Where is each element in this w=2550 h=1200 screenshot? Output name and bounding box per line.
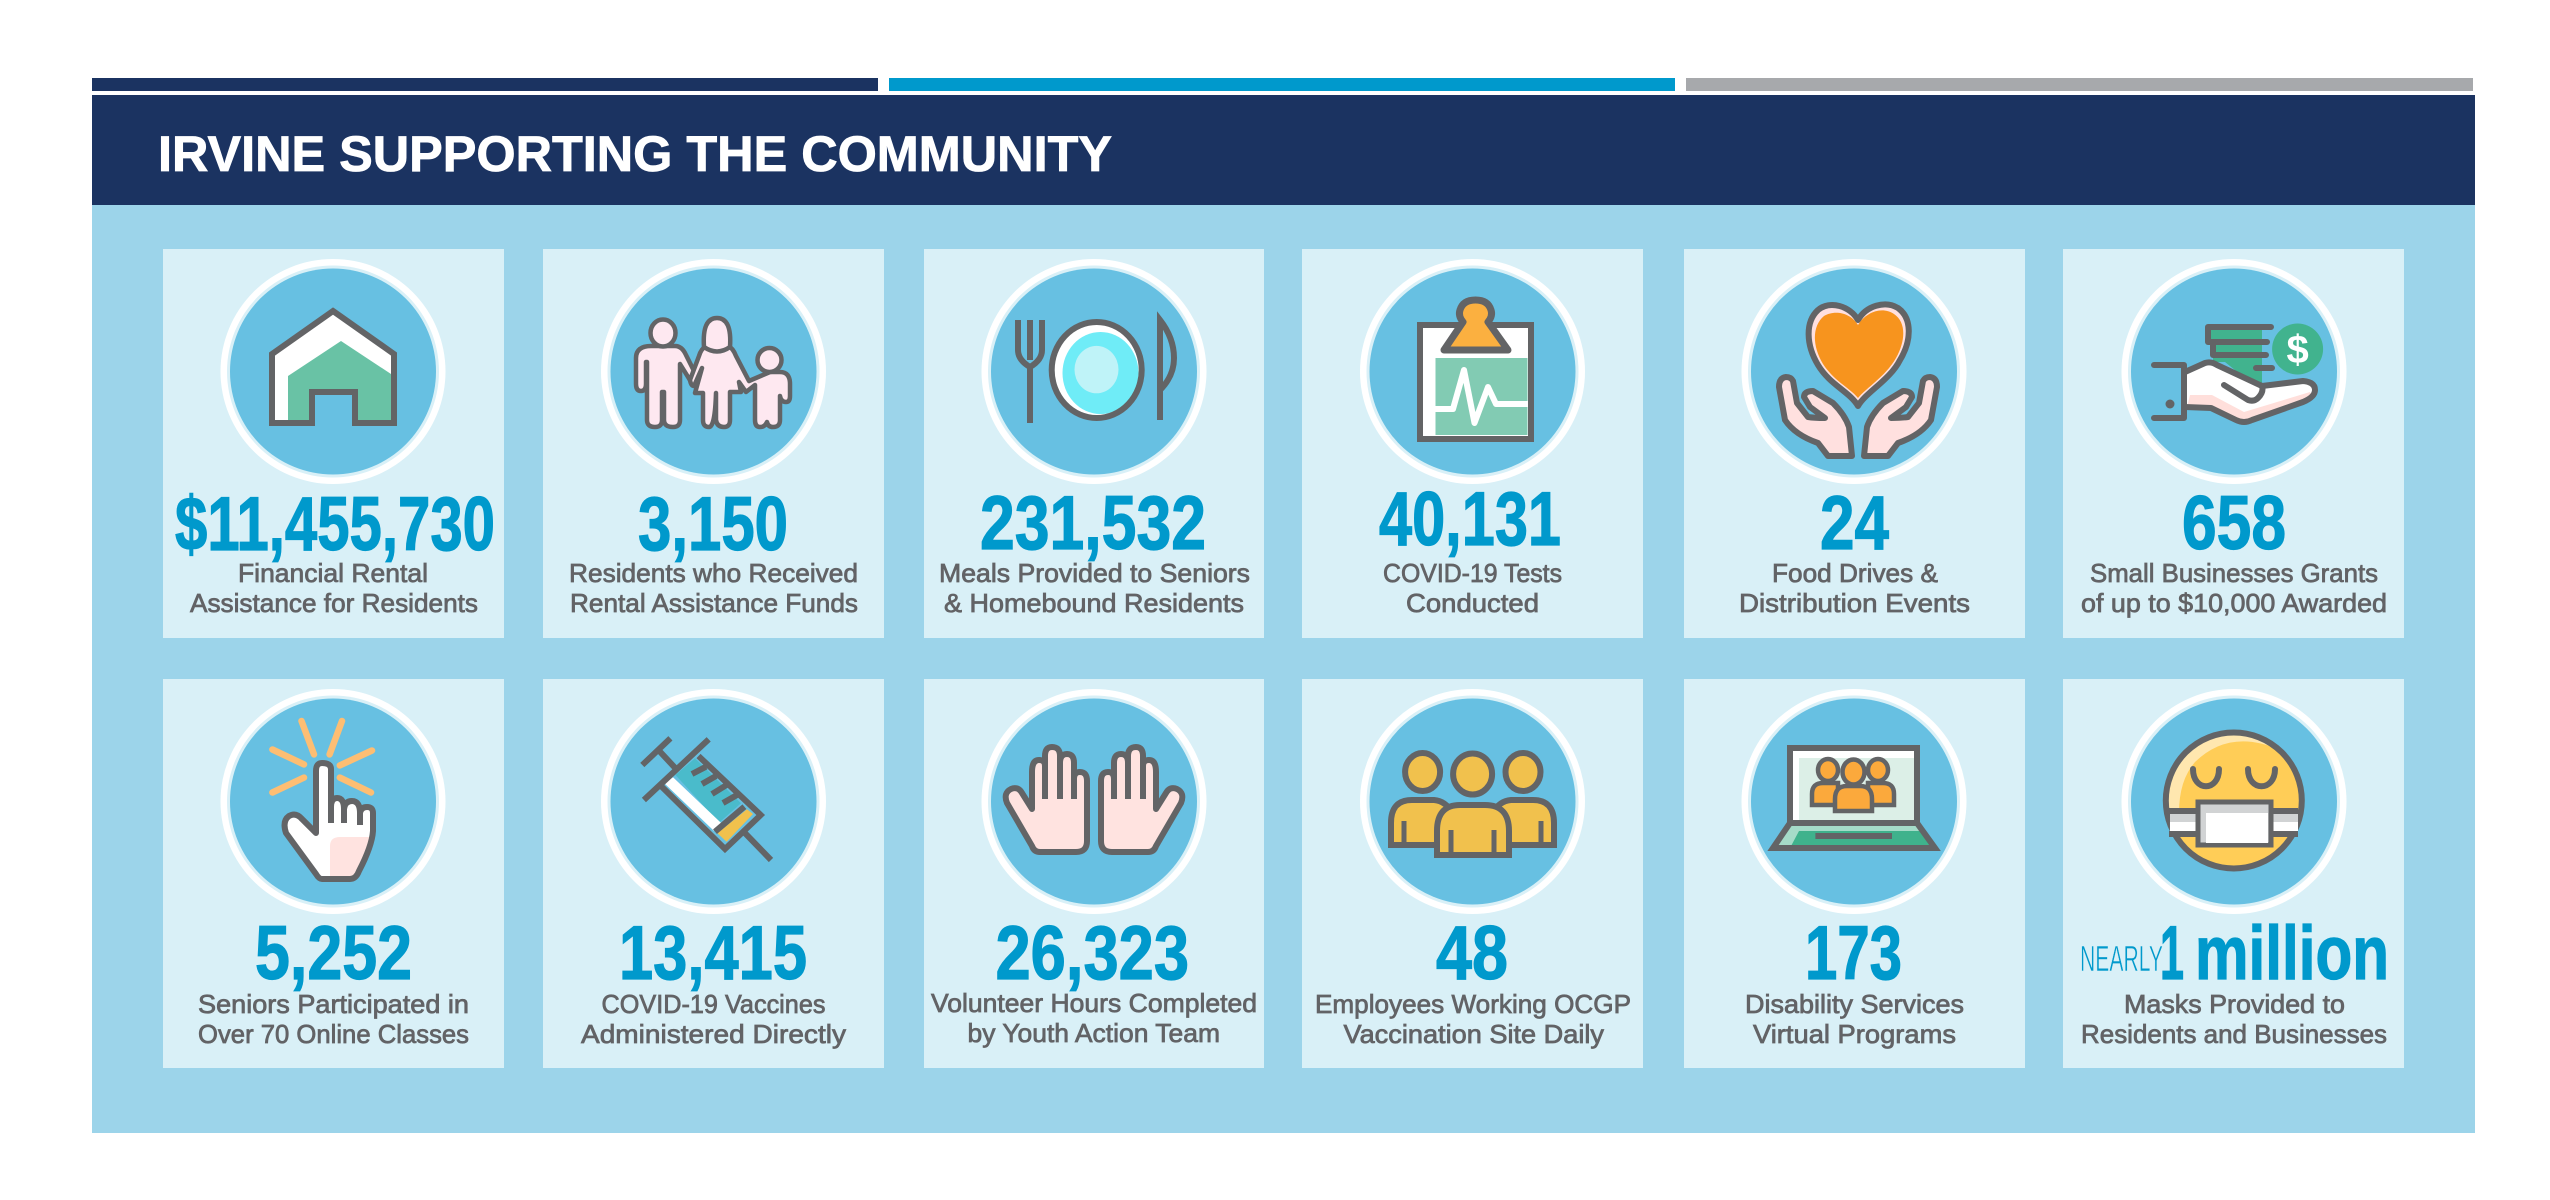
label: Rental Assistance Funds bbox=[570, 588, 858, 618]
number: 40,131 bbox=[1379, 477, 1561, 562]
number: $11,455,730 bbox=[175, 482, 495, 567]
label bbox=[190, 558, 478, 618]
label bbox=[1315, 989, 1631, 1049]
label: Disability Services bbox=[1745, 989, 1964, 1019]
label: Conducted bbox=[1406, 588, 1539, 618]
label bbox=[939, 558, 1250, 618]
number: 231,532 bbox=[980, 481, 1206, 566]
icon: pointing hand bbox=[220, 689, 446, 914]
label: Vaccination Site Daily bbox=[1344, 1019, 1604, 1049]
label bbox=[1745, 989, 1964, 1049]
panel: covid-19 vaccines bbox=[543, 679, 884, 1068]
icon: three people bbox=[1360, 689, 1585, 914]
number: 658 bbox=[2182, 481, 2286, 566]
panel: light blue background bbox=[92, 205, 2475, 1133]
number: nearly 1 million: 1 bbox=[2160, 911, 2184, 996]
label bbox=[198, 989, 469, 1049]
icon: house bbox=[220, 259, 446, 484]
label bbox=[569, 558, 858, 618]
icon: face with mask bbox=[2122, 689, 2346, 914]
label: & Homebound Residents bbox=[944, 588, 1244, 618]
number: nearly 1 million: NEARLY bbox=[2080, 938, 2163, 979]
label: Small Businesses Grants bbox=[2090, 558, 2378, 588]
number: 3,150 bbox=[638, 482, 788, 567]
icon: hand with money: $ bbox=[2286, 328, 2309, 372]
icon: heart in hands bbox=[1742, 259, 1966, 484]
icon: laptop with video call bbox=[1742, 689, 1966, 914]
label: Seniors Participated in bbox=[198, 989, 469, 1019]
title: IRVINE SUPPORTING THE COMMUNITY bbox=[158, 126, 1112, 182]
icon: open hands bbox=[982, 689, 1206, 914]
label: Residents who Received bbox=[569, 558, 858, 588]
label: Masks Provided to bbox=[2124, 989, 2345, 1019]
number: nearly 1 million: million bbox=[2195, 911, 2389, 996]
panel: financial rental assistance bbox=[163, 249, 504, 638]
label bbox=[2081, 558, 2387, 618]
label: Food Drives & bbox=[1772, 558, 1938, 588]
label: Distribution Events bbox=[1739, 588, 1970, 618]
number: 173 bbox=[1805, 911, 1902, 996]
icon: syringe bbox=[601, 689, 826, 914]
label: Residents and Businesses bbox=[2081, 1019, 2387, 1049]
label bbox=[2081, 989, 2387, 1049]
panel: residents receiving funds bbox=[543, 249, 884, 638]
icon: clipboard with pulse bbox=[1360, 259, 1585, 484]
label: by Youth Action Team bbox=[968, 1018, 1220, 1048]
icon: family bbox=[601, 259, 826, 484]
panel: covid-19 tests bbox=[1302, 249, 1643, 638]
label: Employees Working OCGP bbox=[1315, 989, 1631, 1019]
panel: disability services bbox=[1684, 679, 2025, 1068]
label: Administered Directly bbox=[581, 1019, 846, 1049]
number: 26,323 bbox=[996, 911, 1189, 996]
label: Assistance for Residents bbox=[190, 588, 478, 618]
number: 13,415 bbox=[619, 911, 807, 996]
label: Financial Rental bbox=[238, 558, 428, 588]
header band bbox=[92, 95, 2475, 205]
icon: hand with money bbox=[2122, 259, 2346, 484]
top accent bars bbox=[92, 78, 2473, 91]
panel: masks provided bbox=[2063, 679, 2404, 1068]
label bbox=[1739, 558, 1970, 618]
number: nearly 1 million bbox=[2080, 911, 2389, 996]
label bbox=[581, 989, 846, 1049]
label: COVID-19 Vaccines bbox=[602, 989, 826, 1019]
panel: employees at vaccination site bbox=[1302, 679, 1643, 1068]
panel: meals provided bbox=[924, 249, 1264, 638]
number: 48 bbox=[1436, 911, 1508, 996]
panel: food drives bbox=[1684, 249, 2025, 638]
label bbox=[931, 988, 1257, 1048]
label: Virtual Programs bbox=[1753, 1019, 1956, 1049]
label: Meals Provided to Seniors bbox=[939, 558, 1250, 588]
icon: plate and cutlery bbox=[982, 259, 1206, 484]
label: COVID-19 Tests bbox=[1383, 558, 1562, 588]
label: of up to $10,000 Awarded bbox=[2081, 588, 2387, 618]
label: Volunteer Hours Completed bbox=[931, 988, 1257, 1018]
panel: volunteer hours bbox=[924, 679, 1264, 1068]
number: 24 bbox=[1820, 481, 1889, 566]
label bbox=[1383, 558, 1562, 618]
panel: seniors online classes bbox=[163, 679, 504, 1068]
number: 5,252 bbox=[255, 911, 412, 996]
label: Over 70 Online Classes bbox=[198, 1019, 469, 1049]
panel: small business grants bbox=[2063, 249, 2404, 638]
